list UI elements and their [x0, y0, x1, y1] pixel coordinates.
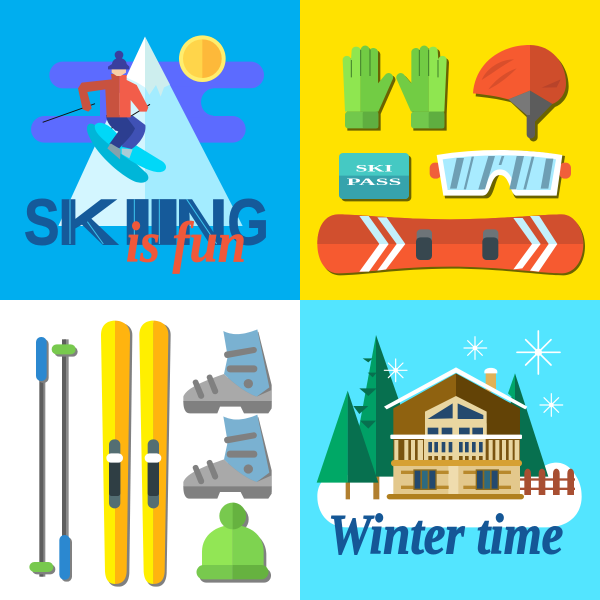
snowflakes — [384, 331, 563, 416]
SKIING title: K — [57, 186, 119, 259]
helmet — [473, 45, 569, 141]
fence — [520, 469, 575, 495]
ski pass: PASS — [347, 177, 401, 188]
torso and arms — [78, 74, 148, 117]
sun — [179, 35, 226, 82]
SKIING title: I — [119, 185, 157, 258]
goggles — [430, 150, 571, 198]
skis — [87, 123, 166, 183]
face and hat — [108, 51, 129, 76]
ski poles — [43, 104, 150, 134]
SKIING title: N — [175, 186, 228, 258]
front tree — [317, 391, 378, 499]
SKIING inline strokes — [70, 199, 217, 244]
tall tree — [350, 335, 400, 499]
SKIING title: S — [24, 185, 60, 259]
back right tree — [500, 373, 548, 477]
skier — [43, 51, 166, 183]
SKIING title — [24, 185, 269, 259]
ski pass — [339, 153, 411, 201]
ski pass: SKI — [355, 164, 393, 175]
panel: winter time — [300, 300, 600, 600]
ski boot upper — [183, 329, 272, 413]
chalet — [384, 367, 527, 499]
panel: equipment on yellow — [300, 0, 600, 300]
panel: skiing is fun — [0, 0, 300, 300]
ski boot lower — [183, 415, 272, 499]
snowboard — [317, 214, 585, 275]
snow ground — [317, 463, 582, 527]
clouds — [31, 62, 264, 143]
beanie — [196, 503, 271, 583]
Winter time title: Winter time — [328, 503, 563, 566]
mountain — [58, 37, 243, 226]
SKIING title: G — [227, 185, 269, 259]
ski poles — [29, 337, 78, 582]
skis — [101, 321, 171, 587]
legs — [106, 115, 146, 159]
gloves — [343, 45, 449, 131]
SKIING title: I — [142, 186, 186, 258]
panel: gear on white — [0, 300, 300, 600]
is fun script: is fun — [126, 212, 246, 275]
